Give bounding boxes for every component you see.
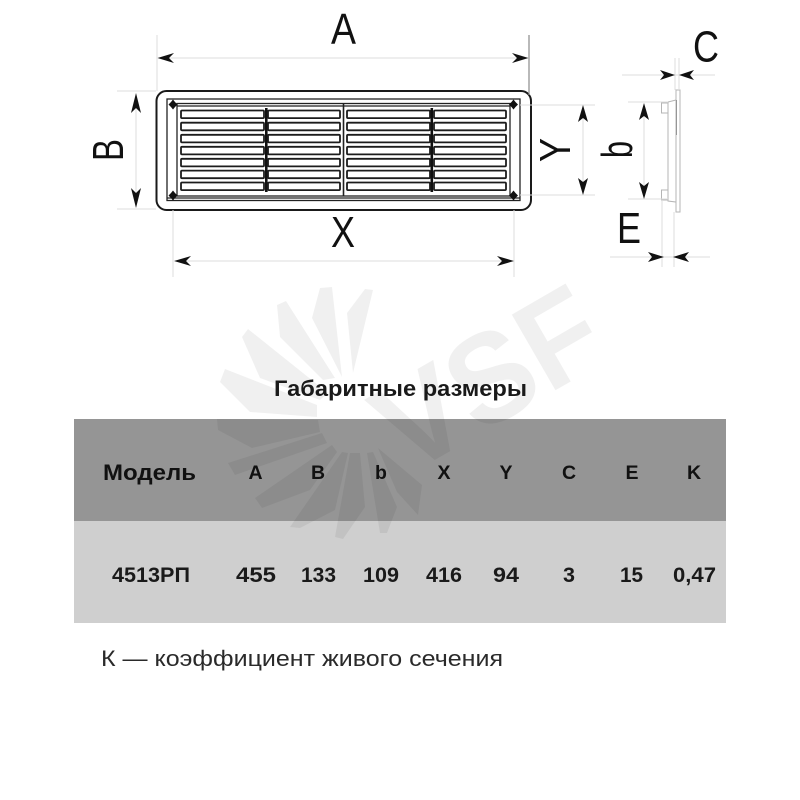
dimension E: E [617,204,641,253]
dimension B: B [84,139,133,161]
side view of the grille [662,90,680,212]
dimension Y: Y [531,138,580,162]
table header labels: Y [499,462,513,484]
table row values: 109 [363,564,399,587]
dimension C [622,22,719,90]
dimension Y [520,105,595,195]
table header labels: K [687,462,701,484]
table row values: 416 [426,564,462,587]
table header labels: E [625,462,639,484]
louver slats [181,108,506,192]
inner frame [167,99,520,200]
mounting screws [168,100,518,200]
front view of the grille [156,91,531,210]
outer frame [156,91,531,210]
table header background [74,419,726,521]
dimension E [610,200,710,267]
table header labels: B [311,462,325,484]
dimension X [173,208,514,277]
dimension B [84,91,156,209]
table row values: 94 [493,564,519,587]
table header labels: b [375,462,387,484]
table row values: 4513РП [112,564,190,587]
title: Габаритные размеры [274,376,527,401]
dimension X: X [331,208,355,257]
watermark: VSF logo [217,257,627,539]
table row values [112,564,716,587]
watermark: VSF logo: VSF [350,257,627,499]
table row values: 0,47 [673,564,716,587]
table row values: 133 [301,564,336,587]
table header labels: C [562,462,576,484]
table header labels: Модель [103,460,196,485]
table header labels [103,460,701,485]
dimension b: b [593,141,642,158]
dimension C: C [693,22,719,72]
table header labels: A [248,462,263,484]
table row background [74,521,726,623]
table row values: 15 [620,564,643,587]
table row values: 455 [236,564,276,587]
table header labels: X [437,462,451,484]
footnote: К — коэффициент живого сечения [101,646,503,671]
dimension A: A [331,5,357,54]
dimension A [157,5,529,95]
table row values: 3 [563,564,575,587]
dimension b [593,102,668,199]
